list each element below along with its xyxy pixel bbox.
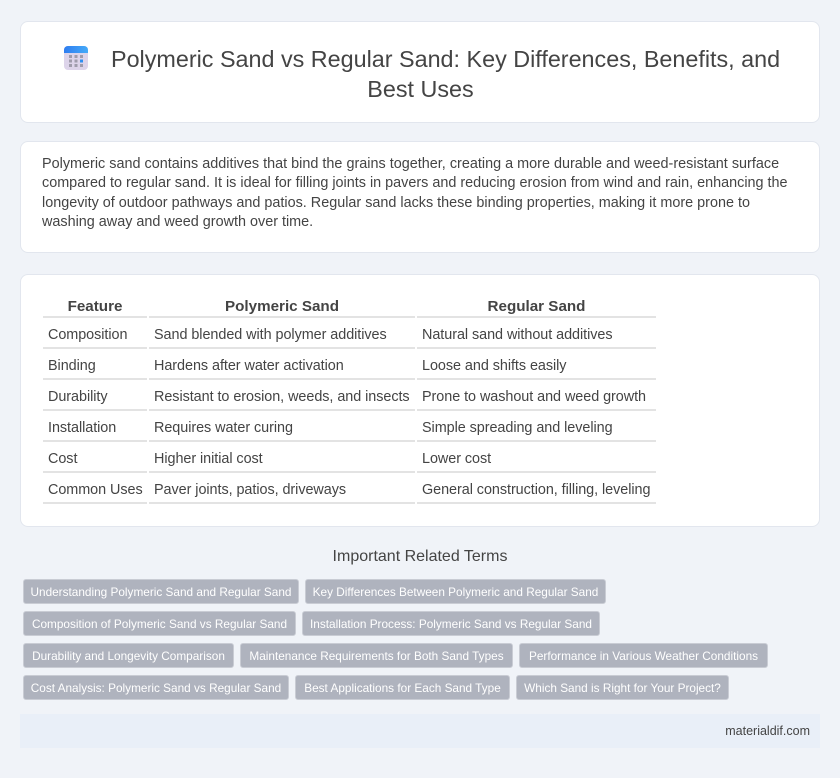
tag: Key Differences Between Polymeric and Regular Sand: [313, 585, 598, 599]
panel: introduction: [20, 141, 820, 253]
row: durability: Prone to washout and weed growth: [422, 389, 646, 405]
intro text: compared to regular sand. It is ideal for filling joints in pavers and reducing erosion from wind and rain, enhancing the: [42, 175, 788, 191]
tag: Which Sand is Right for Your Project?: [524, 681, 721, 695]
related terms tags: [23, 579, 768, 700]
row: binding: Hardens after water activation: [154, 358, 344, 374]
row: installation: Requires water curing: [154, 420, 293, 436]
tag: [240, 643, 513, 668]
icon: calendar: [64, 46, 88, 70]
tag: Maintenance Requirements for Both Sand Types: [249, 649, 504, 663]
row: cost: Lower cost: [422, 451, 491, 467]
table header: [68, 298, 585, 315]
row: installation: [48, 420, 613, 436]
comparison table: [43, 298, 656, 504]
intro text: washing away and weed growth over time.: [42, 214, 313, 230]
intro text: longevity of outdoor pathways and patios. Regular sand lacks these binding properties, making it more prone to: [42, 195, 750, 211]
row: binding: Binding: [48, 358, 96, 374]
row: composition: Composition: [48, 327, 127, 343]
tag: [305, 579, 606, 604]
footer source: materialdif.com: [725, 724, 810, 738]
tag: [295, 675, 510, 700]
table header: Polymeric Sand: [225, 298, 339, 315]
row: binding: [48, 358, 566, 374]
tag: [516, 675, 729, 700]
row: durability: Durability: [48, 389, 107, 405]
row: common uses: [48, 482, 650, 498]
title: [111, 46, 780, 102]
footer: [20, 714, 820, 748]
table header: Regular Sand: [488, 298, 585, 315]
tag: Cost Analysis: Polymeric Sand vs Regular Sand: [31, 681, 281, 695]
row: installation: Installation: [48, 420, 116, 436]
tag: [23, 643, 234, 668]
panel: comparison table: [20, 274, 820, 527]
table header: Feature: [68, 298, 122, 315]
tag: [23, 611, 296, 636]
row: composition: Natural sand without additives: [422, 327, 612, 343]
row: cost: [48, 451, 492, 467]
row: composition: Sand blended with polymer additives: [154, 327, 387, 343]
tag: Composition of Polymeric Sand vs Regular Sand: [32, 617, 287, 631]
title: Best Uses: [367, 76, 474, 102]
row: common uses: Common Uses: [48, 482, 143, 498]
tag: [23, 675, 289, 700]
tag: Understanding Polymeric Sand and Regular Sand: [30, 585, 292, 599]
title: Polymeric Sand vs Regular Sand: Key Differences, Benefits, and: [111, 46, 780, 72]
tag: Performance in Various Weather Conditions: [529, 649, 758, 663]
row: composition: [48, 327, 612, 343]
row: binding: Loose and shifts easily: [422, 358, 566, 374]
heading: related terms: Important Related Terms: [333, 548, 507, 565]
tag: [519, 643, 768, 668]
row: installation: Simple spreading and leveling: [422, 420, 613, 436]
row: cost: Cost: [48, 451, 77, 467]
tag: Durability and Longevity Comparison: [32, 649, 225, 663]
tag: [302, 611, 600, 636]
row: durability: Resistant to erosion, weeds, and insects: [154, 389, 410, 405]
intro text: Polymeric sand contains additives that bind the grains together, creating a more durable and weed-resistant surface: [42, 156, 779, 172]
tag: [23, 579, 299, 604]
tag: Best Applications for Each Sand Type: [304, 681, 501, 695]
row: cost: Higher initial cost: [154, 451, 263, 467]
intro text: [42, 156, 788, 230]
row: common uses: General construction, filling, leveling: [422, 482, 650, 498]
row: durability: [48, 389, 646, 405]
row: common uses: Paver joints, patios, driveways: [154, 482, 346, 498]
tag: Installation Process: Polymeric Sand vs Regular Sand: [310, 617, 592, 631]
panel: title header: [20, 21, 820, 123]
